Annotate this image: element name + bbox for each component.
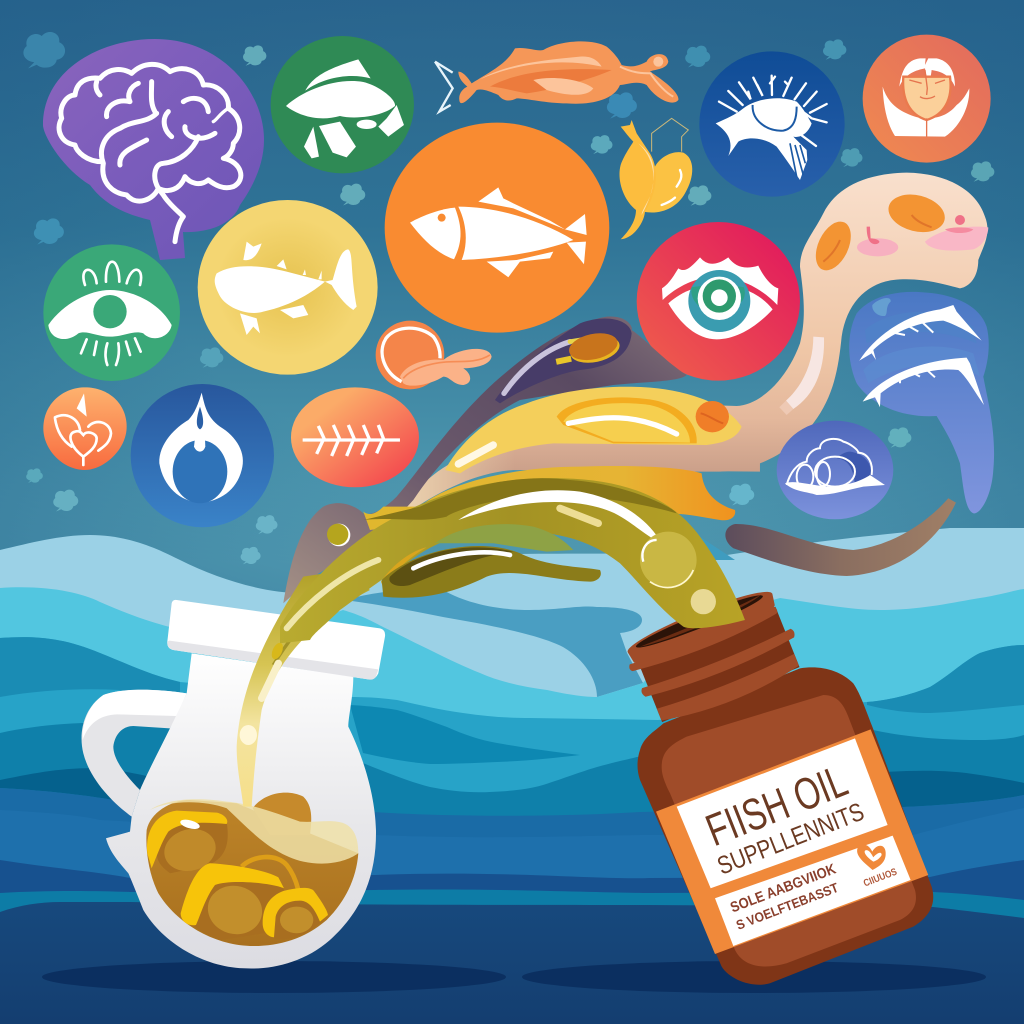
bottle of fish oil supplements: [620, 582, 933, 985]
oil stream: gold layer: [363, 466, 735, 530]
bottle neck and threaded lip: [620, 582, 809, 732]
icon: droplet on blue circle: [131, 384, 274, 527]
white label: details: CIIUUOS: [862, 867, 899, 889]
stream pouring into jug: [237, 570, 370, 807]
white label: product name: SUPPLLENNITS: [714, 798, 868, 881]
oil stream: tan band: [383, 405, 760, 530]
oil in jug: [146, 793, 358, 946]
ocean waves: [0, 520, 1024, 1024]
decorative small clouds: [23, 32, 994, 564]
pale oil surface: [150, 799, 358, 864]
jug body: [106, 653, 376, 969]
capsule: [181, 863, 284, 940]
white label: details: [715, 836, 911, 946]
capsule: [263, 888, 328, 939]
oil stream: yellow layer: [445, 387, 742, 473]
icon: fish bones in blue bubble: [849, 292, 994, 513]
icon: brown swoosh: [725, 498, 956, 576]
icon: whale on yellow circle: [198, 200, 378, 375]
icon: antlered creature on deep blue circle: [699, 51, 845, 197]
icon: eye on red circle: [637, 222, 800, 381]
jug lid: [167, 600, 385, 680]
capsule: [147, 811, 228, 877]
icon: spiky mark and orange fish creature: [435, 41, 678, 112]
orange label band: [656, 729, 928, 954]
bottle inner panel: [662, 695, 916, 967]
icon: face on orange circle: [863, 35, 991, 163]
oil stream: mauve swirl: [283, 317, 687, 603]
icon: heart on small orange circle: [43, 387, 127, 470]
white label: details: S VOELFTEBASST: [734, 880, 841, 933]
white label: product name: [677, 738, 888, 888]
icon: fish on green circle: [271, 36, 414, 173]
jug handle: [82, 690, 187, 817]
white label: product name: FIISH OIL: [699, 755, 854, 856]
bottle body: [637, 667, 933, 985]
icon: brain in purple speech bubble: [43, 39, 264, 260]
icon: eye on green circle: [43, 244, 180, 381]
white label: details: SOLE AABGVIIOK: [728, 861, 839, 916]
icon: yellow capsule pair: [619, 118, 692, 239]
icon: tan shape with spots: [653, 173, 988, 472]
icon: fishbone on coral oval: [291, 387, 419, 487]
icon: cloud shape on blue circle: [777, 421, 893, 519]
shadows under jug and bottle: [42, 961, 986, 993]
ceramic jug with capsules: [82, 570, 385, 969]
icon: large fish on orange circle: [385, 123, 609, 333]
capsule ring: [242, 857, 298, 890]
oil stream: olive arc flowing out of bottle: [280, 478, 745, 643]
icon: small orange circle with worm: [376, 321, 492, 389]
